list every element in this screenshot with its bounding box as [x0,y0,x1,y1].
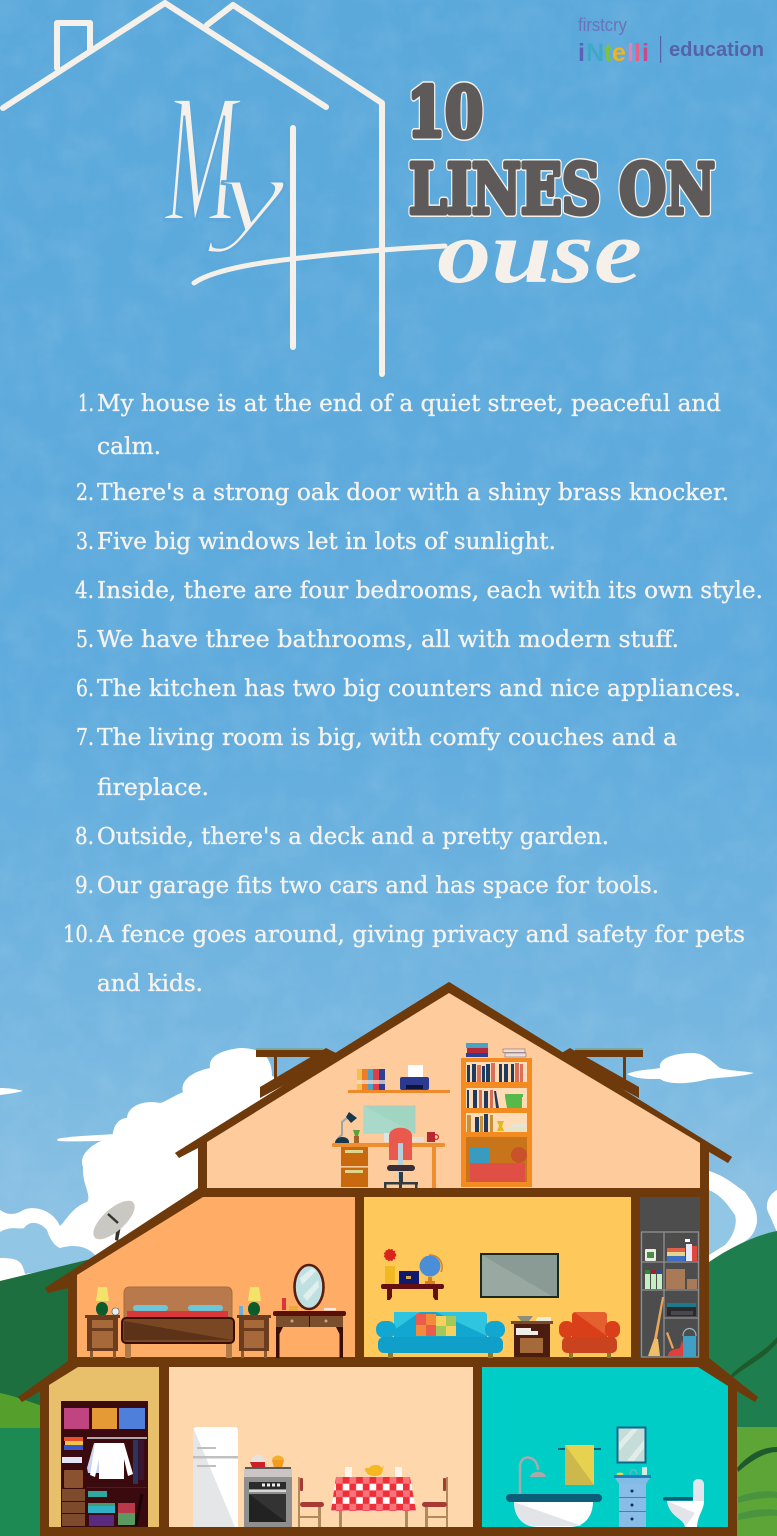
kitchen right chair [422,1477,448,1527]
kitchen table with checked cloth [331,1465,416,1527]
line 9: 9. [75,873,94,899]
bedroom left nightstand and lamp [85,1287,120,1358]
title: 10: 10 [407,73,483,153]
title: 10: 10 [407,73,483,153]
study bookcase [461,1043,532,1187]
logo: FirstCry Intelli education [578,15,764,67]
room: attic study [207,993,700,1188]
line 1: 1. [78,391,94,417]
living room television [481,1254,558,1297]
line 7: The living room is big, with comfy couches and a [97,725,677,751]
line 7 [76,725,677,801]
line 8: Outside, there's a deck and a pretty garden. [97,824,609,850]
line 10: and kids. [97,971,203,997]
line 5: We have three bathrooms, all with modern stuff. [97,627,679,653]
title: My: y [206,135,286,253]
logo wordmark: intelli: e [612,39,626,67]
clouds [0,1048,777,1285]
title: My: M [164,56,242,261]
line 7: 7. [76,725,94,751]
bedroom bed [122,1287,234,1358]
kitchen left chair [298,1477,324,1527]
logo wordmark: intelli: i [642,39,649,67]
logo wordmark: intelli: i [578,39,585,67]
room: bedroom [77,1197,355,1357]
bedroom right nightstand and lamp [237,1287,271,1358]
study shelf with binders and printer [348,1065,450,1093]
room: wardrobe [49,1367,159,1527]
living room armchair [559,1312,620,1358]
room: living room [364,1197,631,1357]
line 5: 5. [76,627,94,653]
study desk with computer, lamp and chair [332,1106,445,1188]
line 3: 3. [76,529,94,555]
satellite dish [87,1194,141,1246]
logo wordmark: intelli: t [604,39,613,67]
logo wordmark: intelli: l [634,39,641,67]
line 10 [63,922,745,997]
bathroom mirror and sink cabinet [614,1428,651,1527]
line 1: calm. [97,434,161,460]
line 10: 10. [63,922,94,948]
line 2: 2. [76,480,94,506]
bathroom bathtub and shower [506,1458,602,1527]
line 1 [78,391,721,460]
roof supports and panels [256,1048,643,1098]
living room shelf with flower, box and globe [381,1250,444,1300]
line 7: fireplace. [97,775,209,801]
line 6: 6. [76,676,94,702]
logo divider [660,36,661,63]
hills [0,1231,777,1536]
line 4: 4. [75,578,94,604]
bathroom toilet [663,1479,704,1527]
wardrobe [61,1401,148,1527]
house outline line art [3,3,445,374]
logo wordmark: intelli: N [586,39,604,67]
storage shelves [642,1232,698,1357]
bedroom dressing table and mirror [273,1265,346,1358]
house cross-section [18,982,758,1536]
numbered list of ten lines [63,391,763,997]
line 4: Inside, there are four bedrooms, each with its own style. [97,578,763,604]
room: kitchen [169,1367,473,1527]
logo wordmark: intelli: l [627,39,634,67]
kitchen stove and pots [244,1454,292,1527]
logo wordmark: education: education [669,39,764,61]
cloud shadow patches [0,1190,736,1274]
room: bathroom [482,1367,728,1527]
title: ouse: ouse [437,203,642,302]
line 1: My house is at the end of a quiet street, peaceful and [97,391,721,417]
line 2: There's a strong oak door with a shiny brass knocker. [97,480,729,506]
living room sofa and cushion [376,1312,505,1358]
line 3: Five big windows let in lots of sunlight. [97,529,556,555]
house structure [18,982,758,1536]
line 9: Our garage fits two cars and has space for tools. [97,873,659,899]
logo wordmark: intelli [578,39,649,67]
line 8: 8. [75,824,94,850]
kitchen fridge [193,1427,238,1527]
line 6: The kitchen has two big counters and nice appliances. [97,676,741,702]
room: storage [640,1197,700,1357]
bathroom towel [558,1445,601,1485]
line 10: A fence goes around, giving privacy and safety for pets [96,922,745,948]
title: My [164,56,286,261]
logo wordmark: firstcry: firstcry [578,15,627,35]
living room side table [511,1316,553,1357]
